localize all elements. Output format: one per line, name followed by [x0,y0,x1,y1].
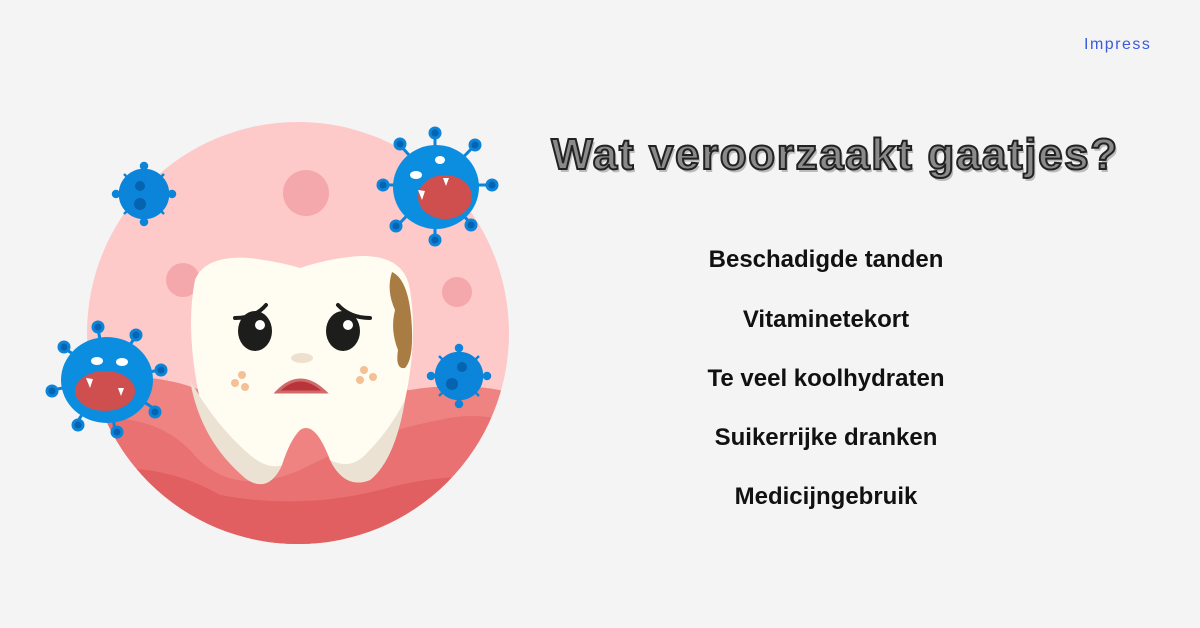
illustration: tooth with bacteria [46,122,509,544]
virus: small right [428,345,490,407]
item 4: Suikerrijke dranken [715,424,937,451]
virus: big top-right [378,128,497,245]
cavity [390,272,412,368]
virus: big left [47,322,166,437]
tooth [190,256,413,484]
item 5: Medicijngebruik [735,483,917,510]
eyes [238,311,272,351]
item 3: Te veel koolhydraten [708,365,944,392]
gums [107,378,501,544]
item 1: Beschadigde tanden [709,246,943,273]
title: Wat veroorzaakt gaatjes? [551,130,1119,179]
brand: Impress [1084,36,1151,53]
item 2: Vitaminetekort [743,306,909,333]
list of causes [708,246,944,510]
pink circle background [87,122,509,544]
virus: small top-left [113,163,175,225]
